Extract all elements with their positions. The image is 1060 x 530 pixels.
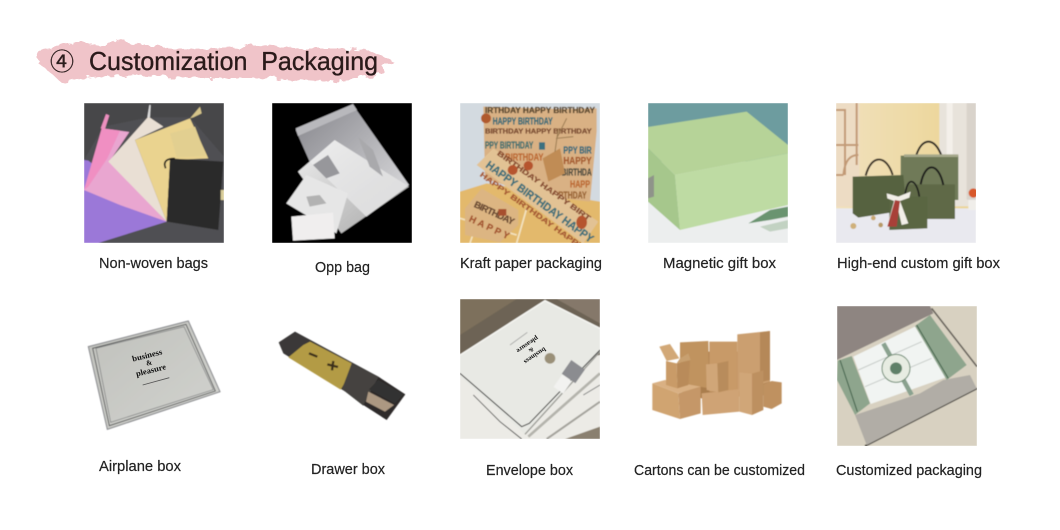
box logo text: pleasure xyxy=(135,362,167,378)
label: customized packaging: Customized packaging xyxy=(836,462,982,479)
label: opp bag: Opp bag xyxy=(315,259,370,276)
gift tag xyxy=(543,148,565,182)
left bag xyxy=(853,175,907,218)
box side xyxy=(648,148,680,230)
tissue paper top xyxy=(837,306,933,360)
box logo text xyxy=(514,334,547,365)
photo: kraft paper packaging: IRTHDAY HAPPY BIRTHDAY xyxy=(485,106,596,115)
photo: customized packaging xyxy=(837,306,977,446)
lower stacked boxes xyxy=(460,355,600,439)
photo: opp bag xyxy=(272,103,412,243)
middle small carton xyxy=(706,363,718,392)
open drawer xyxy=(363,377,405,420)
box front xyxy=(675,153,788,230)
small right carton xyxy=(763,381,782,409)
photo: drawer box xyxy=(279,332,405,420)
big bottom-left carton xyxy=(652,383,680,419)
rolled parcel xyxy=(477,148,598,243)
label: high-end custom gift box: High-end custom gift box xyxy=(837,255,1000,272)
label: envelope box: Envelope box xyxy=(486,462,573,479)
label: drawer box: Drawer box xyxy=(311,461,385,478)
photo: non-woven bags xyxy=(84,103,224,243)
green ends left xyxy=(837,356,870,415)
yellow sleeve band xyxy=(288,342,352,390)
box logo text: business xyxy=(131,347,164,364)
lower-left parcel xyxy=(465,188,518,242)
photo: kraft paper packaging: HAPPY xyxy=(563,156,592,167)
heading text: Customization Packaging xyxy=(89,46,378,76)
box logo text xyxy=(131,347,168,378)
photo: kraft paper packaging: BIRTHDAY HAPPY BIRTHDAY xyxy=(485,127,592,136)
open carton xyxy=(666,361,677,388)
top box xyxy=(460,300,600,434)
photo: kraft paper packaging: PY BIRTHDAY xyxy=(493,152,544,163)
bottom-middle carton xyxy=(702,389,739,415)
pink brush stroke xyxy=(37,39,392,83)
box logo text: & xyxy=(145,358,153,368)
label: airplane box: Airplane box xyxy=(99,458,181,475)
photo: kraft paper packaging: HAPPY BIRTHDAY xyxy=(493,116,553,127)
box shadow edge xyxy=(865,388,977,446)
back bag xyxy=(901,156,958,200)
photo: magnetic gift box xyxy=(648,103,788,243)
carton shadow backing xyxy=(680,352,770,398)
circled number four: ④ xyxy=(50,42,74,77)
photo: airplane box xyxy=(88,321,220,429)
middle bag xyxy=(907,184,955,219)
photo: kraft paper packaging: BIRTHDAY HAPPY BIRT xyxy=(495,149,593,223)
photo: kraft paper packaging: HAPP xyxy=(570,180,590,191)
front bag xyxy=(889,197,927,230)
photo: kraft paper packaging: HAPPY xyxy=(467,214,512,241)
photo: kraft paper packaging: HAPPY BIRTHDAY HAPPY xyxy=(478,170,586,252)
box logo text: & xyxy=(527,345,534,353)
tall front carton xyxy=(739,372,752,415)
title: brush stroke heading xyxy=(37,39,392,83)
top parcel xyxy=(483,107,597,202)
back-middle carton xyxy=(709,342,737,392)
tall carton xyxy=(737,331,770,392)
label: cartons can be customized: Cartons can be customized xyxy=(634,462,805,479)
ribbon band xyxy=(883,343,912,395)
scarf bow xyxy=(887,192,911,226)
box lid xyxy=(648,112,788,175)
back-left carton xyxy=(680,341,709,388)
label: non-woven bags: Non-woven bags xyxy=(99,255,208,272)
floor xyxy=(836,208,976,243)
box logo text: pleasure xyxy=(515,334,539,354)
photo: kraft paper packaging: BIRTHDAY xyxy=(472,199,517,227)
label: magnetic gift box: Magnetic gift box xyxy=(663,255,776,272)
photo: kraft paper packaging: RTHDAY xyxy=(558,190,587,201)
photo: envelope box xyxy=(460,299,600,439)
lower tissue xyxy=(855,375,977,445)
photo: high-end custom gift box xyxy=(836,103,976,243)
label: kraft paper packaging: Kraft paper packaging xyxy=(460,255,602,272)
leaf xyxy=(748,207,788,223)
photo: kraft paper packaging xyxy=(460,103,600,252)
green ends right xyxy=(915,315,967,380)
box logo text: business xyxy=(522,345,547,365)
photo: cartons xyxy=(652,331,782,419)
round seal xyxy=(882,354,910,382)
photo: kraft paper packaging: PPY BIRTHDAY xyxy=(485,140,534,151)
towel centre xyxy=(853,327,946,404)
